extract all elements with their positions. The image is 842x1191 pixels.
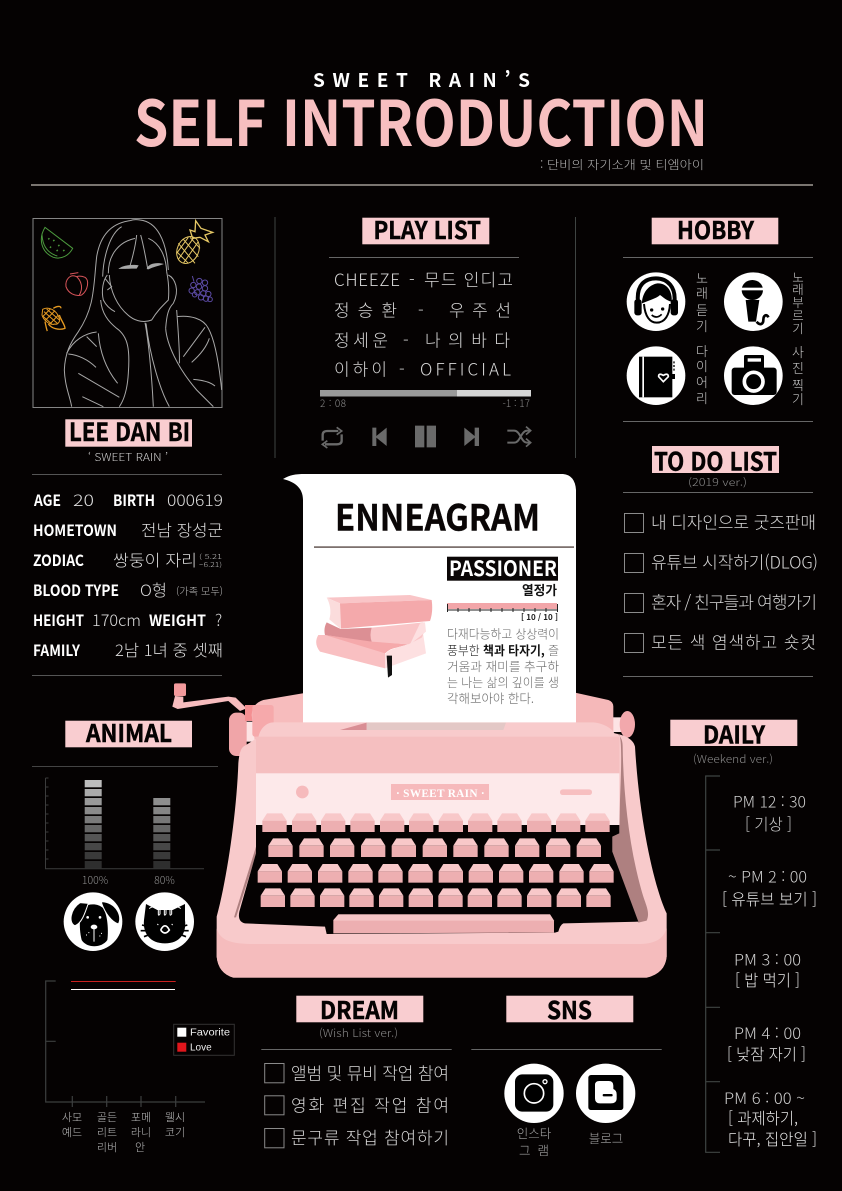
label: diary: 어: [696, 372, 708, 391]
row: age and birth: 20: [73, 487, 94, 511]
wish list: 영화 편집 작업 참여: [291, 1092, 449, 1116]
carriage back left: [252, 692, 308, 743]
label: photo: 기: [792, 389, 804, 408]
icon: grapes: [189, 276, 212, 302]
sns labels: 그 램: [519, 1140, 549, 1159]
progress bar: [320, 390, 531, 410]
description: [447, 624, 559, 707]
axis labels: 리트: [97, 1124, 117, 1140]
nameplate: [296, 784, 592, 800]
label: diary: 이: [696, 356, 708, 375]
row: age and birth: 000619: [167, 487, 223, 511]
schedule: [ 밥 먹기 ]: [735, 967, 800, 991]
icon: listening to music: [627, 272, 685, 331]
wish list: 앨범 및 뮤비 작업 참여: [291, 1060, 449, 1084]
icon: previous: [372, 428, 387, 446]
song list: 정 승 환: [334, 296, 397, 322]
axis labels: 코기: [165, 1124, 185, 1140]
schedule: [ 과제하기,: [728, 1105, 798, 1129]
schedule: PM 3 : 00: [734, 947, 801, 971]
panel: hobby: [623, 212, 813, 422]
name tag: LEE DAN BI: [69, 413, 190, 449]
label: singing: 노: [792, 267, 804, 286]
panel: to do list: [623, 442, 818, 677]
portrait line drawing: [64, 220, 222, 407]
row: zodiac: ( 5.21: [199, 551, 223, 561]
icon: blogger: [576, 1064, 635, 1123]
icon: repeat: [322, 427, 342, 448]
heading: dream: [296, 992, 423, 1027]
schedule: [ 유튜브 보기 ]: [722, 886, 817, 910]
line chart: favorite and love: [46, 981, 234, 1155]
wish list: 문구류 작업 참여하기: [291, 1124, 449, 1149]
name tag: [65, 413, 192, 465]
heading: animal: ANIMAL: [85, 715, 172, 750]
panel: play list: [320, 212, 531, 448]
song list: 이 하 이: [334, 356, 387, 380]
checklist: 모든 색 염색하고 숏컷: [651, 628, 816, 654]
legend: Favorite: [190, 1028, 230, 1038]
axis labels: 안: [135, 1139, 145, 1155]
description: 는 나는 삶의 깊이를 생: [447, 672, 559, 691]
heading: sns: SNS: [547, 992, 592, 1027]
schedule: [722, 788, 817, 1150]
legend: [174, 1024, 234, 1055]
heading: daily: DAILY: [703, 716, 766, 751]
description: 거움과 재미를 추구하: [447, 656, 559, 675]
row: height and weight: ?: [215, 607, 222, 631]
song list: 무드 인디고: [424, 266, 513, 291]
checklist: 유튜브 시작하기(DLOG): [651, 548, 818, 574]
song list: OFFICIAL: [420, 356, 511, 380]
personality type label: PASSIONER: [449, 553, 557, 583]
axis labels: 골든: [97, 1109, 117, 1125]
description: 다재다능하고 상상력이: [447, 624, 559, 642]
heading: dream: DREAM: [320, 992, 399, 1027]
heading: sns: [506, 992, 633, 1027]
nameplate: · SWEET RAIN ·: [396, 788, 485, 800]
icon: pause: [415, 426, 436, 447]
paper slot: [340, 723, 506, 730]
icon: next: [464, 428, 479, 446]
row: blood type: (가족 모두): [176, 583, 223, 598]
bar chart: [46, 778, 204, 888]
icon: shuffle: [507, 427, 531, 447]
description: 풍부한 책과 타자기, 즐: [447, 640, 559, 659]
row: family: 2남 1녀 중 셋째: [115, 637, 223, 661]
bar chart: 100%: [82, 873, 108, 888]
axis labels: 라니: [131, 1124, 151, 1140]
panel: animal: [32, 715, 218, 951]
player controls: [322, 426, 531, 448]
song list: 우 주 선: [449, 296, 511, 322]
row: blood type: [33, 577, 223, 601]
row: hometown: 전남 장성군: [141, 517, 223, 541]
heading: hobby: HOBBY: [677, 212, 755, 247]
timeline bracket: [706, 776, 720, 1152]
label: singing: 부: [792, 292, 804, 311]
row: zodiac: ~6.21): [199, 559, 222, 569]
song list: CHEEZE: [334, 266, 400, 291]
row: zodiac: [33, 547, 223, 571]
row: age and birth: [33, 487, 223, 511]
axis labels: 리버: [97, 1139, 117, 1155]
sns labels: 블로그: [589, 1128, 623, 1147]
axis labels: 웰시: [165, 1109, 185, 1125]
description: 각해보아야 한다.: [447, 688, 534, 707]
icon: corn: [42, 306, 65, 331]
sns labels: 인스타: [517, 1123, 552, 1142]
song list: -: [399, 356, 405, 380]
label: singing: 르: [792, 305, 804, 324]
row: blood type: BLOOD TYPE: [33, 579, 119, 601]
caption: (2019 ver.): [688, 475, 747, 490]
checklist: [624, 508, 818, 654]
panel: daily: [670, 716, 817, 1152]
typewriter rear: [172, 683, 308, 756]
row: age and birth: BIRTH: [113, 489, 155, 511]
label: listening: 노: [696, 268, 708, 287]
song list: -: [403, 326, 409, 352]
nickname: ‘ SWEET RAIN ’: [88, 450, 168, 465]
schedule: [ 낮잠 자기 ]: [727, 1041, 806, 1065]
heading: enneagram: ENNEAGRAM: [335, 490, 540, 542]
sns labels: [517, 1123, 623, 1159]
schedule: PM 12 : 30: [733, 788, 806, 812]
row: hometown: HOMETOWN: [33, 519, 117, 541]
icon: diary: [627, 346, 685, 405]
song list: -: [418, 296, 424, 322]
row: height and weight: HEIGHT: [33, 609, 84, 631]
label: listening: 듣: [696, 300, 708, 319]
panel: profile facts: [33, 487, 223, 661]
right knob: [613, 711, 635, 738]
carriage lever: [172, 683, 247, 711]
score bar: [ 10 / 10 ]: [521, 612, 558, 623]
icon: instagram: [504, 1064, 564, 1123]
label: listening: 기: [696, 316, 708, 335]
label: diary: 다: [696, 341, 708, 360]
label: singing: 기: [792, 318, 804, 337]
icon: dog: [64, 892, 122, 951]
caption: (Wish List ver.): [319, 1025, 398, 1041]
row: blood type: O형: [140, 577, 167, 601]
row: zodiac: 쌍둥이 자리: [113, 547, 197, 571]
checklist: 혼자 / 친구들과 여행가기: [651, 588, 817, 614]
label: photo: 사: [792, 342, 804, 361]
icon: camera: [724, 346, 783, 405]
typewriter rear right: [575, 693, 635, 738]
heading: hobby: [652, 212, 778, 247]
heading: to do list: TO DO LIST: [654, 442, 777, 478]
axis labels: 사모: [62, 1109, 82, 1125]
song list: [334, 266, 513, 380]
row: family: [33, 637, 223, 661]
progress bar: 2 : 08: [320, 395, 346, 410]
title: SELF INTRODUCTION: [134, 74, 708, 165]
label: photo: 진: [792, 358, 804, 377]
axis labels: 예드: [62, 1124, 82, 1140]
progress bar: -1 : 17: [502, 395, 530, 410]
axis labels: [62, 1109, 185, 1155]
legend: Love: [190, 1042, 212, 1054]
icon: microphone: [724, 272, 783, 331]
space bar: [333, 914, 554, 933]
row: height and weight: 170cm: [92, 607, 141, 631]
row: age and birth: AGE: [33, 489, 61, 511]
keys: [258, 813, 614, 907]
left knob: [229, 705, 257, 756]
row: height and weight: WEIGHT: [149, 609, 206, 631]
song list: 정 세 운: [334, 326, 388, 352]
schedule: ~ PM 2 : 00: [728, 864, 807, 888]
schedule: [ 기상 ]: [745, 811, 792, 835]
caption: (Weekend ver.): [693, 751, 773, 767]
typewriter body: [217, 722, 667, 978]
checklist: 내 디자인으로 굿즈판매: [651, 508, 816, 534]
heading: daily: [670, 716, 797, 751]
icon: peach: [66, 273, 88, 295]
axis labels: 포메: [131, 1109, 151, 1125]
panel: sns: [471, 992, 662, 1159]
label: photo: 찍: [792, 375, 804, 394]
label: diary: 리: [696, 388, 708, 407]
song list: 나 의 바 다: [425, 326, 510, 352]
korean type label: 열정가: [522, 580, 557, 599]
row: zodiac: ZODIAC: [33, 549, 84, 571]
row: family: FAMILY: [33, 639, 81, 661]
enneagram paper: [283, 474, 576, 724]
icon: cat: [135, 892, 194, 951]
score bar: [447, 603, 558, 623]
icon: pineapple: [172, 221, 213, 267]
row: hometown: [33, 517, 223, 541]
heading: play list: PLAY LIST: [374, 212, 481, 247]
icon: watermelon: [41, 227, 73, 258]
panel: dream: [261, 992, 452, 1149]
panel: portrait: [33, 218, 222, 408]
schedule: PM 4 : 00: [734, 1020, 801, 1044]
subtitle: : 단비의 자기소개 및 티엠아이: [540, 156, 704, 173]
schedule: PM 6 : 00 ~: [724, 1085, 805, 1109]
bar chart: 80%: [154, 873, 175, 888]
schedule: 다꾸, 집안일 ]: [728, 1126, 817, 1150]
label: listening: 래: [696, 283, 708, 302]
label: singing: 래: [792, 279, 804, 298]
header: [31, 66, 813, 186]
song list: -: [409, 266, 415, 291]
row: height and weight: [33, 607, 222, 631]
icon: stacked books: [316, 595, 432, 678]
keyboard well: [239, 825, 638, 934]
kicker: sweet rain's: SWEET RAIN’S: [313, 66, 530, 93]
wish list: [265, 1060, 449, 1149]
